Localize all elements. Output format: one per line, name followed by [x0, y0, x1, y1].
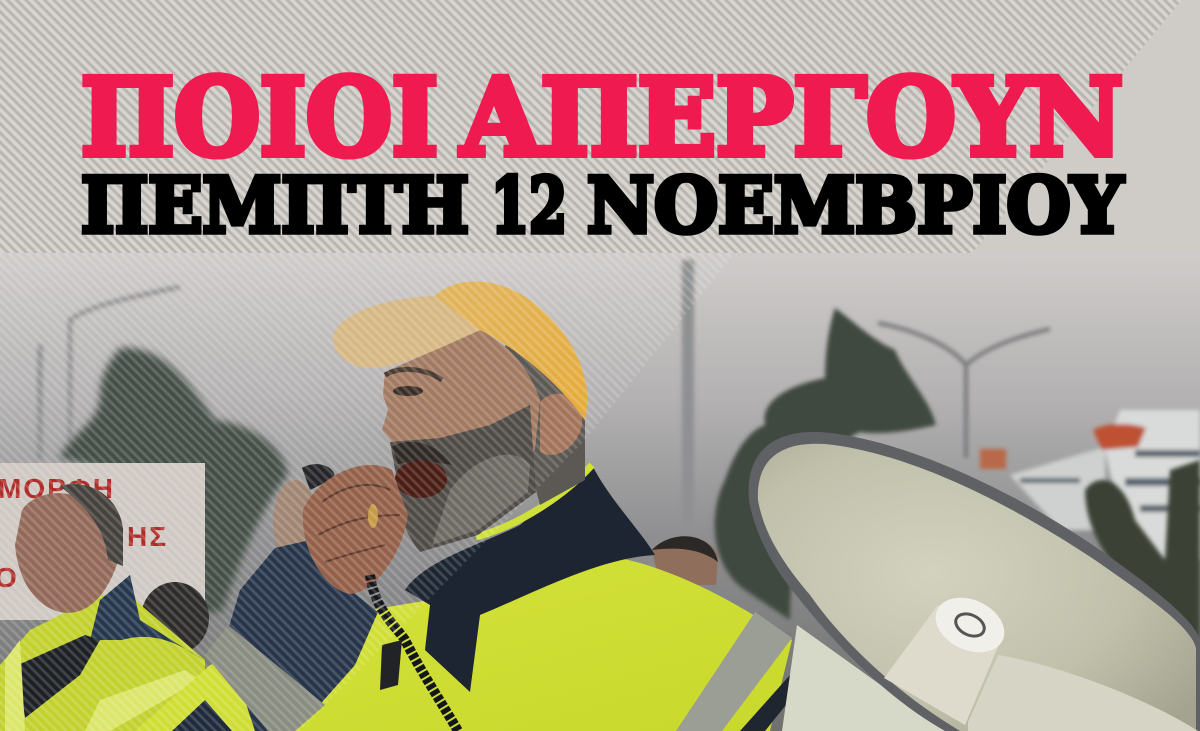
hand with microphone	[303, 465, 408, 594]
left worker hair	[60, 484, 123, 566]
microphone clip	[380, 640, 402, 690]
left worker shirt	[18, 635, 100, 718]
title line 1: ΠΟΙΟΙ	[81, 54, 438, 180]
dark collar	[405, 465, 655, 692]
background tree right	[715, 308, 936, 620]
moustache	[392, 442, 452, 465]
dark strip right	[740, 675, 790, 731]
back hair	[505, 345, 585, 505]
reflective sleeve band	[205, 625, 325, 731]
title line 2: 12	[491, 161, 567, 250]
background ship	[980, 410, 1200, 560]
banner	[0, 463, 205, 620]
yellow cap	[333, 281, 587, 420]
cap crown	[430, 281, 587, 420]
top band: striped background	[0, 0, 1182, 253]
background street lamp right	[878, 323, 1050, 458]
left worker reflective stripes	[5, 640, 200, 731]
yellow collar trim	[476, 465, 592, 537]
driver cylinder	[884, 605, 1003, 725]
ear	[540, 394, 582, 455]
driver cap logo	[952, 610, 988, 640]
horn body lower	[782, 625, 945, 731]
left worker collar	[90, 575, 203, 660]
microphone cord	[370, 575, 458, 731]
dark lower sleeve	[172, 700, 232, 731]
photo sky	[0, 253, 1200, 731]
background bushes right	[1085, 460, 1200, 640]
title line 2: ΠΕΜΠΤΗ	[81, 161, 469, 250]
horn inside	[758, 444, 1196, 731]
horn outer rim	[749, 432, 1200, 731]
megaphone	[749, 432, 1200, 731]
photo: protest scene	[0, 253, 1200, 731]
title	[81, 54, 1124, 250]
reflective band right	[676, 612, 792, 731]
driver cap	[927, 587, 1013, 663]
eye and brow	[385, 369, 442, 380]
cap bill	[333, 296, 480, 368]
dark jacket sleeve	[225, 540, 378, 731]
face	[382, 330, 540, 480]
beard	[390, 405, 536, 552]
background tree left	[60, 348, 288, 612]
title line 2	[81, 161, 1124, 250]
title line 1: ΑΠΕΡΓΟΥΝ	[460, 54, 1123, 180]
driver base	[968, 655, 1198, 731]
banner: ΜΟΡΦΗ	[0, 473, 115, 504]
title line 2: ΝΟΕΜΒΡΙΟΥ	[587, 161, 1124, 250]
background people	[141, 464, 718, 654]
background poles	[40, 260, 694, 530]
main worker	[135, 281, 792, 731]
left worker	[0, 484, 205, 731]
mouth	[395, 460, 447, 498]
beard grey highlights	[432, 455, 530, 545]
left worker neck and face	[15, 493, 120, 613]
left worker vest	[0, 595, 205, 731]
wedding ring	[368, 504, 378, 528]
banner: ΗΣ	[127, 521, 168, 552]
jacket and vest	[135, 555, 792, 731]
diagonal stripe overlay on photo	[0, 253, 735, 731]
title line 1	[81, 54, 1123, 180]
top band: light background	[0, 0, 1200, 253]
